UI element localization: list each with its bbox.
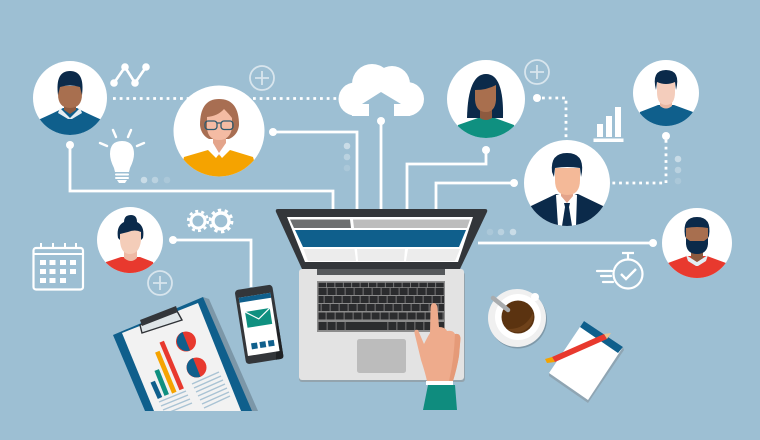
person: woman with glasses and orange sweater xyxy=(174,86,264,180)
laptop base xyxy=(299,272,465,382)
icon: calendar xyxy=(33,243,83,290)
person: businessman in suit xyxy=(524,140,610,235)
laptop hinge xyxy=(317,269,445,275)
coffee cup on saucer xyxy=(488,289,547,348)
notepad binding xyxy=(580,321,623,353)
cup handle xyxy=(531,293,539,301)
icon: plus circle top right xyxy=(525,60,549,84)
phone buttons xyxy=(251,340,275,349)
pencil xyxy=(552,334,607,362)
icon: light bulb xyxy=(100,130,144,183)
clipboard with charts xyxy=(113,297,258,414)
clipboard clip xyxy=(140,306,182,333)
infographic: team network around a laptop xyxy=(32,59,732,411)
notepad with pencil xyxy=(545,321,624,403)
connectors: dotted lines xyxy=(113,94,670,183)
trackpad xyxy=(357,339,406,373)
icon: gears xyxy=(188,210,232,232)
icon: plus circle bottom left xyxy=(148,271,172,295)
decorative grey dots xyxy=(141,143,681,235)
person: man in blue sweater xyxy=(33,61,107,140)
person: bearded man in red sweater xyxy=(662,208,732,285)
hand pointing at keyboard xyxy=(414,303,460,410)
keyboard xyxy=(317,281,445,332)
laptop xyxy=(276,209,487,382)
coffee xyxy=(502,300,534,334)
pie charts on clipboard xyxy=(176,332,206,378)
person: woman with hair bun and red top xyxy=(97,207,163,280)
mail icon xyxy=(245,308,272,328)
icon: plus circle top left xyxy=(250,66,274,90)
spoon xyxy=(493,298,508,310)
laptop screen xyxy=(287,217,473,262)
shirt cuff xyxy=(426,381,453,385)
sleeve xyxy=(423,385,457,410)
text lines on clipboard xyxy=(159,372,230,414)
bar chart on clipboard xyxy=(153,342,182,398)
icon: line chart xyxy=(110,63,150,87)
smartphone xyxy=(235,284,284,364)
person: man in blue t-shirt xyxy=(633,60,699,130)
person: woman with long hair and teal top xyxy=(447,60,525,145)
icon: stopwatch xyxy=(597,253,642,288)
icon: bar chart xyxy=(594,107,624,142)
connectors: solid lines into laptop xyxy=(66,117,657,287)
icon: cloud upload xyxy=(338,64,424,117)
laptop screen bezel xyxy=(276,209,487,269)
